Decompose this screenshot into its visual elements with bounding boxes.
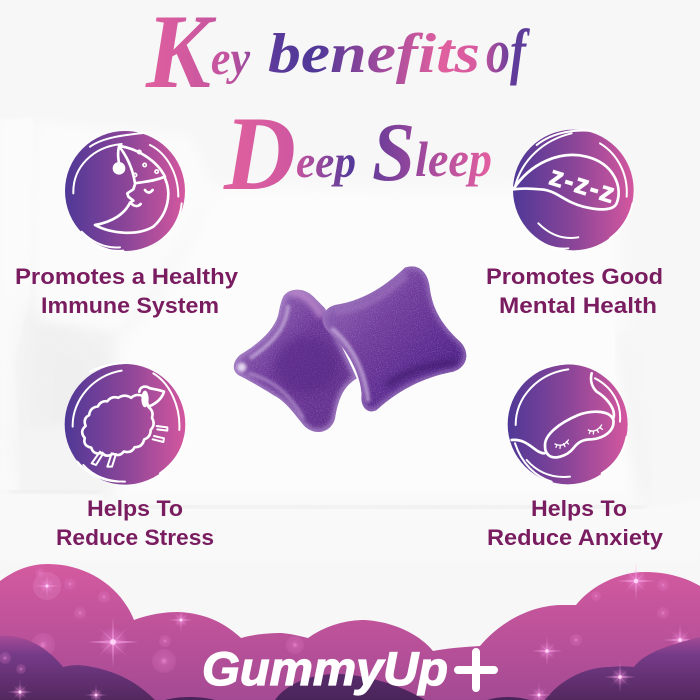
- title line 2: eep: [296, 136, 356, 187]
- clouds: pink back layer: [0, 564, 700, 700]
- title line 1: benefits: [268, 23, 480, 85]
- clouds: purple front layer: [0, 636, 700, 700]
- label: Helps To Reduce Anxiety: Reduce Anxiety: [487, 525, 663, 550]
- icon: jumping sheep: [65, 363, 185, 485]
- label: Promotes Good Mental Health: [486, 264, 663, 318]
- icon: plus sign: [458, 652, 494, 688]
- title line 1: of: [486, 18, 530, 86]
- label: Helps To Reduce Stress: Reduce Stress: [56, 525, 214, 550]
- title line 2: D: [223, 95, 296, 212]
- icon: sleep mask: [508, 363, 628, 484]
- icon: z-z-z sleep bubble: z-z-z: [546, 160, 619, 209]
- label: Helps To Reduce Stress: [56, 496, 214, 550]
- gummies: two purple star gummies: [234, 266, 466, 432]
- label: Promotes a Healthy Immune System: Promotes a Healthy: [15, 264, 239, 289]
- label: Promotes a Healthy Immune System: Immune System: [41, 293, 219, 318]
- sparkles on clouds: [31, 561, 697, 673]
- label: Helps To Reduce Anxiety: [487, 496, 663, 550]
- right gummy: [323, 266, 466, 411]
- label: Helps To Reduce Stress: Helps To: [87, 496, 183, 521]
- icon: z-z-z sleep bubble: [513, 130, 634, 250]
- label: Promotes Good Mental Health: Promotes Good: [486, 264, 663, 289]
- left gummy: [234, 290, 357, 432]
- icon: moon with nightcap: [65, 131, 185, 251]
- logo: GummyUp+: GummyUp: [202, 642, 448, 695]
- title line 1: ey: [211, 32, 251, 85]
- title: Key benefits of Deep Sleep: [145, 0, 530, 110]
- label: Helps To Reduce Anxiety: Helps To: [531, 496, 627, 521]
- label: Promotes a Healthy Immune System: [15, 264, 239, 318]
- label: Promotes Good Mental Health: Mental Health: [499, 293, 657, 318]
- title line 2: leep: [415, 131, 492, 187]
- title line 1: [145, 0, 530, 110]
- title line 2: [223, 95, 492, 212]
- title line 2: S: [372, 106, 415, 199]
